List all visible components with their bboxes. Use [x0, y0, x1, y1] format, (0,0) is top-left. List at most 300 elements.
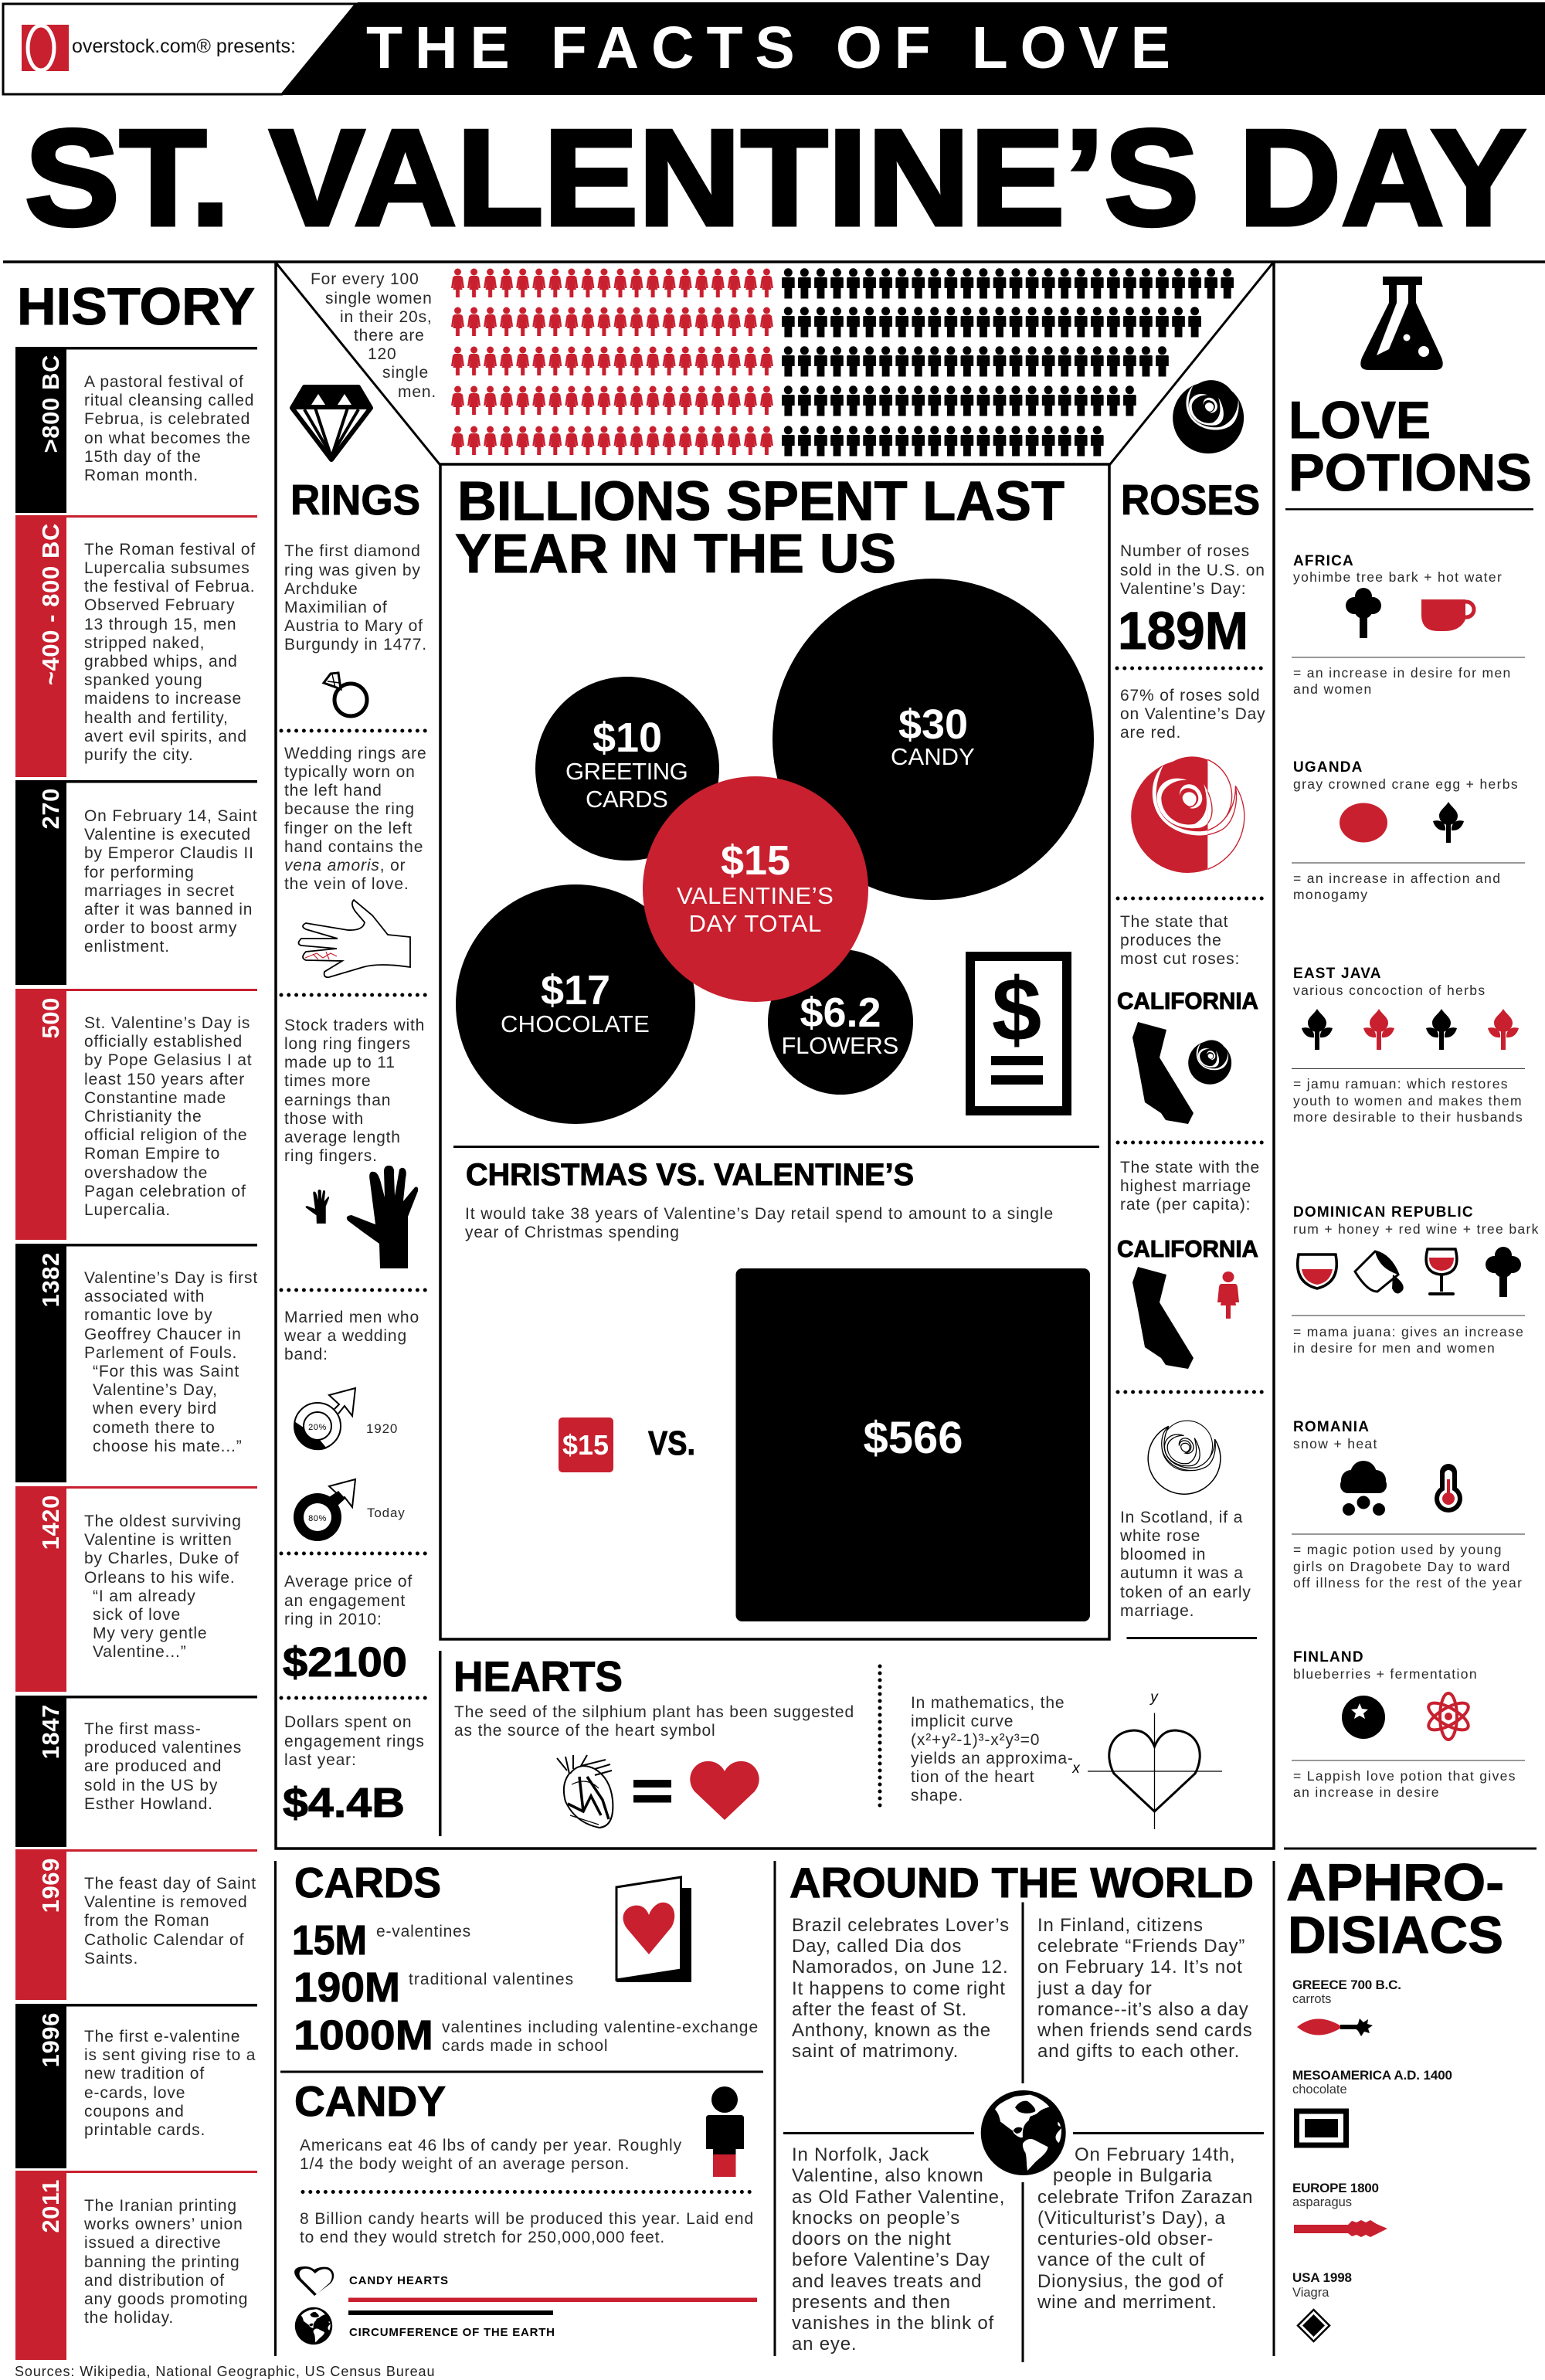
bubble: candy $30: $30: [898, 701, 968, 748]
heading: billions spent: YEAR IN THE US: [455, 524, 896, 585]
text: brazil: Day, called Dia dos: [792, 1936, 962, 1957]
entry: 500: by Pope Gelasius I at: [84, 1051, 252, 1069]
entry: 1847: are produced and: [84, 1757, 222, 1775]
potion: uganda: monogamy: [1293, 887, 1368, 902]
icon: person 1/4 red: [706, 2086, 744, 2177]
entry: 1382: cometh there to: [93, 1419, 216, 1437]
icon: wine glass: [1426, 1249, 1457, 1294]
potion: africa: and women: [1293, 681, 1373, 697]
text: mathematics: yields an approxima-: [911, 1750, 1074, 1767]
heading: roses: ROSES: [1121, 476, 1260, 524]
icon: red woman: [1217, 1271, 1239, 1319]
bubble: greeting cards $10: $10: [593, 715, 662, 761]
panel: hearts: [439, 1651, 1222, 1836]
text: stock traders: times more: [284, 1072, 371, 1090]
text: first diamond ring: [284, 542, 427, 654]
entry: 500: overshadow the: [84, 1164, 208, 1182]
text: norfolk: presents and then: [792, 2292, 951, 2313]
entry: 1382: Valentine’s Day is first: [84, 1269, 258, 1287]
text: 38 years: [465, 1205, 1054, 1241]
entry: 1996: printable cards.: [84, 2121, 205, 2139]
potion: finland: = Lappish love potion that gives: [1293, 1768, 1516, 1784]
text: 46 lbs: Americans eat 46 lbs of candy per year. Roughly: [300, 2137, 682, 2154]
entry: ~400 - 800 BC: Lupercalia subsumes: [84, 559, 250, 577]
entry: 270: for performing: [84, 864, 195, 881]
icon: viagra pill: [1298, 2310, 1329, 2341]
text: finland: In Finland, citizens: [1037, 1915, 1204, 1936]
text: dollars spent: [284, 1713, 425, 1769]
stat: 190M traditional valentines: traditional valentines: [409, 1971, 574, 1988]
panel: candy: [294, 2077, 757, 2344]
entry: 1996: The first e-valentine: [84, 2028, 240, 2046]
entry: 270: after it was banned in: [84, 901, 253, 918]
item: europe: [1292, 2181, 1387, 2237]
entry: ~400 - 800 BC: grabbed whips, and: [84, 653, 238, 671]
text: married men: wear a wedding: [284, 1327, 407, 1345]
entry: 1382: choose his mate...”: [93, 1438, 243, 1455]
text: silphium: [454, 1703, 854, 1740]
heading: love potions: [1289, 391, 1532, 502]
text: silphium: The seed of the silphium plant has been suggested: [454, 1703, 854, 1721]
text: wedding rings: the left hand: [284, 782, 382, 800]
icon: greeting card: [616, 1877, 691, 1982]
entry: 1996: coupons and: [84, 2103, 185, 2120]
entry: 1420: Valentine...”: [93, 1643, 187, 1661]
potion: dominican republic: DOMINICAN REPUBLIC: [1293, 1204, 1474, 1221]
pictogram: men: [782, 268, 1234, 457]
chart: implicit heart curve: x: [1071, 1760, 1081, 1777]
icon: black rose: [1173, 380, 1244, 453]
entry: 2011: banning the printing: [84, 2253, 239, 2271]
pictogram: women: [451, 268, 774, 457]
icon: california map: [1132, 1022, 1194, 1124]
potion: east java: [1292, 966, 1525, 1125]
icon: white rose: [1148, 1421, 1221, 1494]
text: bulgaria: wine and merriment.: [1037, 2292, 1217, 2313]
text: brazil: Brazil celebrates Lover’s: [792, 1915, 1010, 1936]
text: married men: [284, 1309, 419, 1363]
funnel text: 120: [368, 345, 397, 363]
bubble: valentine's total $15: VALENTINE’S: [677, 882, 834, 909]
entry: 500: Christianity the: [84, 1108, 202, 1125]
text: 67% red: 67% of roses sold: [1120, 687, 1260, 704]
entry: ~400 - 800 BC: avert evil spirits, and: [84, 728, 247, 745]
text: wedding rings: vena amoris, or: [284, 857, 406, 874]
entry: 2011: and distribution of: [84, 2272, 225, 2290]
bubble: valentine's total $15: [643, 776, 868, 1002]
entry: 2011: issued a directive: [84, 2234, 222, 2252]
heading: around the world: AROUND THE WORLD: [789, 1859, 1254, 1906]
potion: africa: yohimbe tree bark + hot water: [1293, 569, 1503, 585]
sponsor box: [3, 4, 356, 94]
funnel text: single women: [325, 290, 433, 307]
panel: history: [15, 277, 258, 2360]
text: mathematics: implicit curve: [911, 1713, 1014, 1730]
entry: 1969: [15, 1849, 257, 2000]
text: wedding rings: the vein of love.: [284, 875, 409, 893]
symbol: equals: [633, 1780, 671, 1803]
icon: diamond: [292, 387, 371, 460]
entry: >800 BC: Februa, is celebrated: [84, 410, 250, 428]
text: norfolk: Valentine, also known: [792, 2165, 984, 2186]
potion: romania: ROMANIA: [1293, 1419, 1370, 1435]
potion: romania: = magic potion used by young: [1293, 1542, 1503, 1557]
potion: finland: FINLAND: [1293, 1649, 1364, 1665]
text: marriage rate: highest marriage: [1120, 1177, 1251, 1195]
item: europe: asparagus: [1292, 2195, 1352, 2209]
bubble: valentine's total $15: $15: [721, 837, 790, 884]
icon: egg: [1340, 803, 1387, 842]
text: first diamond ring: Burgundy in 1477.: [284, 636, 427, 654]
black banner: [283, 2, 1545, 95]
entry: 1969: Saints.: [84, 1950, 138, 1967]
potion: romania: [1292, 1419, 1525, 1591]
text: marriage rate: rate (per capita):: [1120, 1196, 1251, 1214]
text: stock traders: ring fingers.: [284, 1147, 378, 1165]
panel frame: [440, 464, 1109, 1639]
icon: small hand: [306, 1190, 329, 1224]
text: finland: just a day for: [1037, 1978, 1153, 1999]
text: bulgaria: people in Bulgaria: [1053, 2165, 1213, 2186]
text: 38 years: year of Christmas spending: [465, 1224, 680, 1241]
item: usa: [1292, 2270, 1352, 2341]
entry: 270: enlistment.: [84, 938, 170, 956]
potion: africa: AFRICA: [1293, 553, 1354, 569]
icon: large hand: [347, 1166, 418, 1268]
stat: 1000M valentines including exchange cards: [294, 2012, 759, 2059]
panel: roses: [1117, 380, 1265, 1639]
entry: 1996: new tradition of: [84, 2065, 205, 2083]
text: 8 billion: 8 Billion candy hearts will be produced this year. Laid end: [300, 2210, 754, 2228]
bubble: chocolate $17: CHOCOLATE: [501, 1010, 650, 1037]
entry: 500: [15, 989, 257, 1240]
item: usa: Viagra: [1292, 2286, 1329, 2300]
heading: history: HISTORY: [17, 277, 255, 336]
potion: uganda: UGANDA: [1293, 759, 1363, 776]
potion: africa: [1292, 553, 1525, 697]
item: greece: GREECE 700 B.C.: [1292, 1978, 1401, 1992]
icon: male symbol 80% today: [294, 1479, 355, 1541]
icon: blueberry: [1342, 1696, 1385, 1739]
entry: 500: Constantine made: [84, 1089, 226, 1107]
stat: 15M e-valentines: 15M: [292, 1917, 367, 1964]
icon: receipt: [970, 956, 1067, 1111]
text: scotland: [1119, 1509, 1251, 1620]
icon: snow cloud: [1340, 1461, 1387, 1516]
text: number of roses: sold in the U.S. on: [1120, 562, 1265, 579]
entry: >800 BC: ritual cleansing called: [84, 392, 254, 409]
icon: male symbol 20% 1920: 20%: [308, 1423, 327, 1432]
bubble: flowers $6.2: [768, 949, 913, 1095]
square: $566: [735, 1268, 1090, 1621]
text: scotland: white rose: [1119, 1527, 1200, 1545]
sources: Sources: Wikipedia, National Geographic, US Census Bureau: [15, 2364, 435, 2379]
stat: $4.4B: $4.4B: [283, 1780, 405, 1826]
icon: tree: [1346, 588, 1381, 638]
entry: 1382: 1382: [37, 1252, 64, 1307]
bubble: greeting cards $10: CARDS: [586, 786, 669, 813]
bubble: chocolate $17: [456, 884, 695, 1124]
main title: ST. VALENTINE’S DAY: [25, 101, 1526, 254]
entry: 1420: [15, 1486, 257, 1692]
square: $15: $15: [562, 1429, 609, 1461]
label: today: Today: [367, 1506, 406, 1520]
icon: honey pot: [1355, 1251, 1404, 1294]
text: brazil: saint of matrimony.: [792, 2041, 959, 2062]
panel: aphrodisiacs: [1286, 1853, 1504, 2341]
stat: 189M: 189M: [1118, 601, 1248, 660]
potion: dominican republic: in desire for men and women: [1293, 1340, 1496, 1356]
text: mathematics: [911, 1694, 1074, 1805]
stat: 15M e-valentines: e-valentines: [376, 1923, 471, 1940]
entry: 500: official religion of the: [84, 1126, 247, 1144]
text: bulgaria: celebrate Trifon Zarazan: [1037, 2187, 1253, 2208]
text: bulgaria: Dionysius, the god of: [1037, 2271, 1224, 2292]
text: marriage rate: The state with the: [1120, 1159, 1260, 1176]
entry: 2011: 2011: [37, 2179, 64, 2233]
entry: ~400 - 800 BC: Observed February: [84, 596, 235, 614]
potion: finland: blueberries + fermentation: [1293, 1666, 1478, 1682]
heading: love potions: POTIONS: [1289, 443, 1532, 502]
text: scotland: autumn it was a: [1120, 1564, 1244, 1582]
heading: aphrodisiacs: APHRO-: [1286, 1853, 1504, 1912]
text: average price: Average price of: [284, 1573, 413, 1591]
heading: love potions: LOVE: [1289, 391, 1431, 450]
text: stock traders: made up to 11: [284, 1054, 396, 1071]
text: stock traders: average length: [284, 1129, 401, 1146]
stat: 1000M valentines including exchange cards: 1000M: [294, 2012, 433, 2059]
text: norfolk: before Valentine’s Day: [792, 2249, 990, 2270]
bubble: valentine's total $15: DAY TOTAL: [689, 910, 822, 937]
icon: rum glass: [1298, 1255, 1336, 1288]
entry: 2011: [15, 2171, 257, 2360]
bubble: flowers $6.2: FLOWERS: [782, 1032, 899, 1059]
icon: cup: [1421, 599, 1474, 631]
text: 8 billion: [300, 2210, 754, 2246]
entry: 500: officially established: [84, 1033, 243, 1051]
entry: ~400 - 800 BC: the festival of Februa.: [84, 578, 255, 596]
entry: 1420: “I am already: [93, 1587, 196, 1605]
icon: male symbol 20% 1920: [294, 1388, 355, 1450]
potion: dominican republic: rum + honey + red wine + tree bark: [1293, 1221, 1540, 1237]
icon: herb: [1433, 802, 1464, 843]
entry: 1420: 1420: [37, 1495, 64, 1550]
stat: 1000M valentines including exchange cards: cards made in school: [442, 2037, 608, 2055]
entry: 1969: from the Roman: [84, 1912, 209, 1930]
panel: rings: [281, 387, 427, 1826]
heading: hearts: HEARTS: [453, 1652, 623, 1700]
text: finland: romance--it’s also a day: [1037, 1999, 1249, 2020]
heading: aphrodisiacs: [1286, 1853, 1504, 1964]
text: finland: celebrate “Friends Day”: [1037, 1936, 1245, 1957]
text: bulgaria: vance of the cult of: [1037, 2249, 1205, 2270]
text: bulgaria: centuries-old obser-: [1037, 2229, 1214, 2249]
entry: 2011: any goods promoting: [84, 2290, 248, 2308]
item: europe: EUROPE 1800: [1292, 2181, 1379, 2195]
square: $566: $566: [863, 1413, 963, 1463]
potion: uganda: = an increase in affection and: [1293, 871, 1501, 886]
text: mathematics: shape.: [911, 1787, 963, 1805]
entry: ~400 - 800 BC: maidens to increase: [84, 690, 242, 708]
entry: 1996: is sent giving rise to a: [84, 2046, 256, 2064]
icon: overstock logo: [22, 25, 69, 71]
text: 67% red: are red.: [1120, 724, 1181, 742]
entry: 1382: when every bird: [92, 1400, 217, 1417]
text: wedding rings: typically worn on: [284, 763, 416, 781]
bubble: candy $30: CANDY: [891, 743, 976, 770]
text: wedding rings: because the ring: [284, 800, 415, 818]
square: $15: [559, 1417, 613, 1472]
text: mathematics: In mathematics, the: [911, 1694, 1065, 1712]
potion: africa: = an increase in desire for men: [1293, 665, 1512, 681]
entry: ~400 - 800 BC: stripped naked,: [84, 634, 205, 652]
potion: east java: more desirable to their husbands: [1293, 1109, 1523, 1125]
entry: 1382: Parlement of Fouls.: [84, 1344, 237, 1362]
entry: 1847: produced valentines: [84, 1739, 242, 1757]
entry: 270: On February 14, Saint: [84, 807, 257, 825]
item: mesoamerica: MESOAMERICA A.D. 1400: [1292, 2068, 1452, 2083]
text: average price: ring in 2010:: [284, 1611, 382, 1628]
bubble: chocolate $17: $17: [541, 967, 610, 1013]
entry: 270: Valentine is executed: [84, 826, 251, 844]
item: mesoamerica: [1292, 2068, 1452, 2145]
text: number of roses: Number of roses: [1120, 542, 1250, 560]
entry: 1847: [15, 1696, 257, 1847]
text: stock traders: long ring fingers: [284, 1035, 411, 1053]
text: average price: an engagement: [284, 1592, 406, 1610]
panel: around the world: [783, 1859, 1264, 2362]
entry: 270: marriages in secret: [84, 882, 235, 900]
funnel text: [311, 270, 436, 401]
heading: aphrodisiacs: DISIACS: [1288, 1906, 1503, 1964]
bubble: flowers $6.2: $6.2: [800, 990, 881, 1036]
entry: 1969: Valentine is removed: [84, 1893, 248, 1911]
entry: 2011: the holiday.: [84, 2309, 174, 2327]
text: brazil: Anthony, known as the: [792, 2020, 991, 2041]
text: state produces: The state that: [1120, 913, 1228, 931]
text: norfolk: an eye.: [792, 2334, 857, 2355]
text: finland: on February 14. It’s not: [1037, 1957, 1243, 1978]
icon: mini rose: [1188, 1040, 1231, 1085]
label: circumference: CIRCUMFERENCE OF THE EARTH: [349, 2326, 555, 2339]
text: norfolk: doors on the night: [792, 2229, 952, 2249]
entry: 1420: sick of love: [93, 1606, 181, 1624]
entry: 270: order to boost army: [84, 919, 237, 937]
text: wedding rings: Wedding rings are: [284, 745, 426, 762]
text: wedding rings: [284, 745, 426, 893]
heading: candy: CANDY: [294, 2077, 446, 2125]
panel: cards: [280, 1859, 763, 2073]
icon: candy heart: [294, 2266, 334, 2296]
entry: ~400 - 800 BC: [15, 515, 257, 777]
potion: uganda: gray crowned crane egg + herbs: [1293, 776, 1519, 792]
label: california: CALIFORNIA: [1117, 1235, 1258, 1262]
text: stock traders: Stock traders with: [284, 1017, 425, 1034]
entry: 2011: works owners’ union: [83, 2215, 243, 2233]
entry: 1996: e-cards, love: [84, 2084, 185, 2102]
text: 67% red: on Valentine’s Day: [1120, 705, 1265, 723]
text: 46 lbs: 1/4 the body weight of an average person.: [300, 2155, 630, 2173]
text: bulgaria: On February 14th,: [1075, 2144, 1235, 2165]
icon: diamond ring: [324, 673, 367, 716]
entry: 1420: by Charles, Duke of: [84, 1550, 239, 1567]
text: first diamond ring: Archduke: [284, 580, 358, 598]
entry: ~400 - 800 BC: spanked young: [84, 671, 202, 689]
potion: dominican republic: [1292, 1204, 1540, 1356]
panel: love potions: [1285, 277, 1540, 1800]
icon: small globe: [295, 2307, 332, 2344]
icon: carrot: [1297, 2018, 1373, 2036]
entry: 2011: The Iranian printing: [84, 2197, 237, 2215]
text: state produces: produces the: [1120, 932, 1222, 949]
text: state produces: [1120, 913, 1240, 968]
text: mathematics: (x²+y²-1)³-x²y³=0: [911, 1731, 1040, 1749]
entry: ~400 - 800 BC: ~400 - 800 BC: [37, 523, 64, 685]
entry: 1969: 1969: [37, 1858, 64, 1913]
text: stock traders: those with: [284, 1110, 364, 1128]
potion: east java: = jamu ramuan: which restores: [1293, 1076, 1509, 1092]
funnel text: single: [382, 364, 429, 382]
funnel text: there are: [354, 327, 425, 345]
entry: 500: least 150 years after: [84, 1071, 245, 1088]
text: dollars spent: last year:: [284, 1751, 357, 1769]
bar: earth circumference: [348, 2310, 553, 2315]
potion: romania: off illness for the rest of the year: [1293, 1575, 1523, 1591]
entry: 1847: Esther Howland.: [84, 1795, 213, 1813]
heading: cards: CARDS: [294, 1859, 441, 1906]
text: scotland: In Scotland, if a: [1120, 1509, 1243, 1526]
text: first diamond ring: The first diamond: [284, 542, 421, 560]
text: scotland: marriage.: [1120, 1602, 1194, 1620]
item: usa: USA 1998: [1292, 2270, 1352, 2285]
potion: east java: youth to women and makes them: [1293, 1093, 1523, 1109]
entry: 1382: “For this was Saint: [93, 1363, 239, 1380]
entry: 1996: 1996: [37, 2012, 64, 2067]
stat: 190M traditional valentines: 190M: [294, 1964, 400, 2011]
entry: 270: 270: [37, 788, 64, 830]
entry: 500: 500: [37, 997, 64, 1039]
label: candy hearts: CANDY HEARTS: [349, 2274, 449, 2287]
potion: finland: [1292, 1649, 1525, 1800]
entry: 1420: Orleans to his wife.: [84, 1569, 236, 1587]
icon: anatomical heart: [557, 1755, 613, 1828]
entry: >800 BC: 15th day of the: [84, 448, 202, 466]
entry: 1420: My very gentle: [93, 1625, 207, 1642]
text: norfolk: knocks on people’s: [792, 2208, 960, 2229]
text: mathematics: tion of the heart: [911, 1768, 1034, 1786]
potion: uganda: [1292, 759, 1525, 902]
text: norfolk: In Norfolk, Jack: [792, 2144, 929, 2165]
label: vs.: VS.: [648, 1424, 695, 1462]
potion: dominican republic: = mama juana: gives an increase: [1293, 1324, 1524, 1339]
bubble: greeting cards $10: GREETING: [565, 758, 689, 785]
entry: 500: Lupercalia.: [84, 1201, 171, 1219]
text: silphium: as the source of the heart symbol: [454, 1722, 716, 1740]
text: bulgaria: [1037, 2144, 1253, 2313]
entry: >800 BC: Roman month.: [84, 467, 199, 484]
text: first diamond ring: Austria to Mary of: [284, 617, 423, 635]
funnel text: in their 20s,: [340, 308, 433, 326]
potion: finland: an increase in desire: [1293, 1784, 1440, 1800]
icon: asparagus: [1294, 2220, 1387, 2237]
panel: men and women funnel: [311, 268, 1234, 457]
entry: 1420: The oldest surviving: [84, 1513, 242, 1530]
entry: ~400 - 800 BC: health and fertility,: [84, 709, 229, 727]
text: wedding rings: hand contains the: [284, 838, 423, 856]
text: norfolk: vanishes in the blink of: [792, 2313, 994, 2334]
entry: >800 BC: [15, 347, 257, 513]
text: brazil: Namorados, on June 12.: [792, 1957, 1008, 1978]
